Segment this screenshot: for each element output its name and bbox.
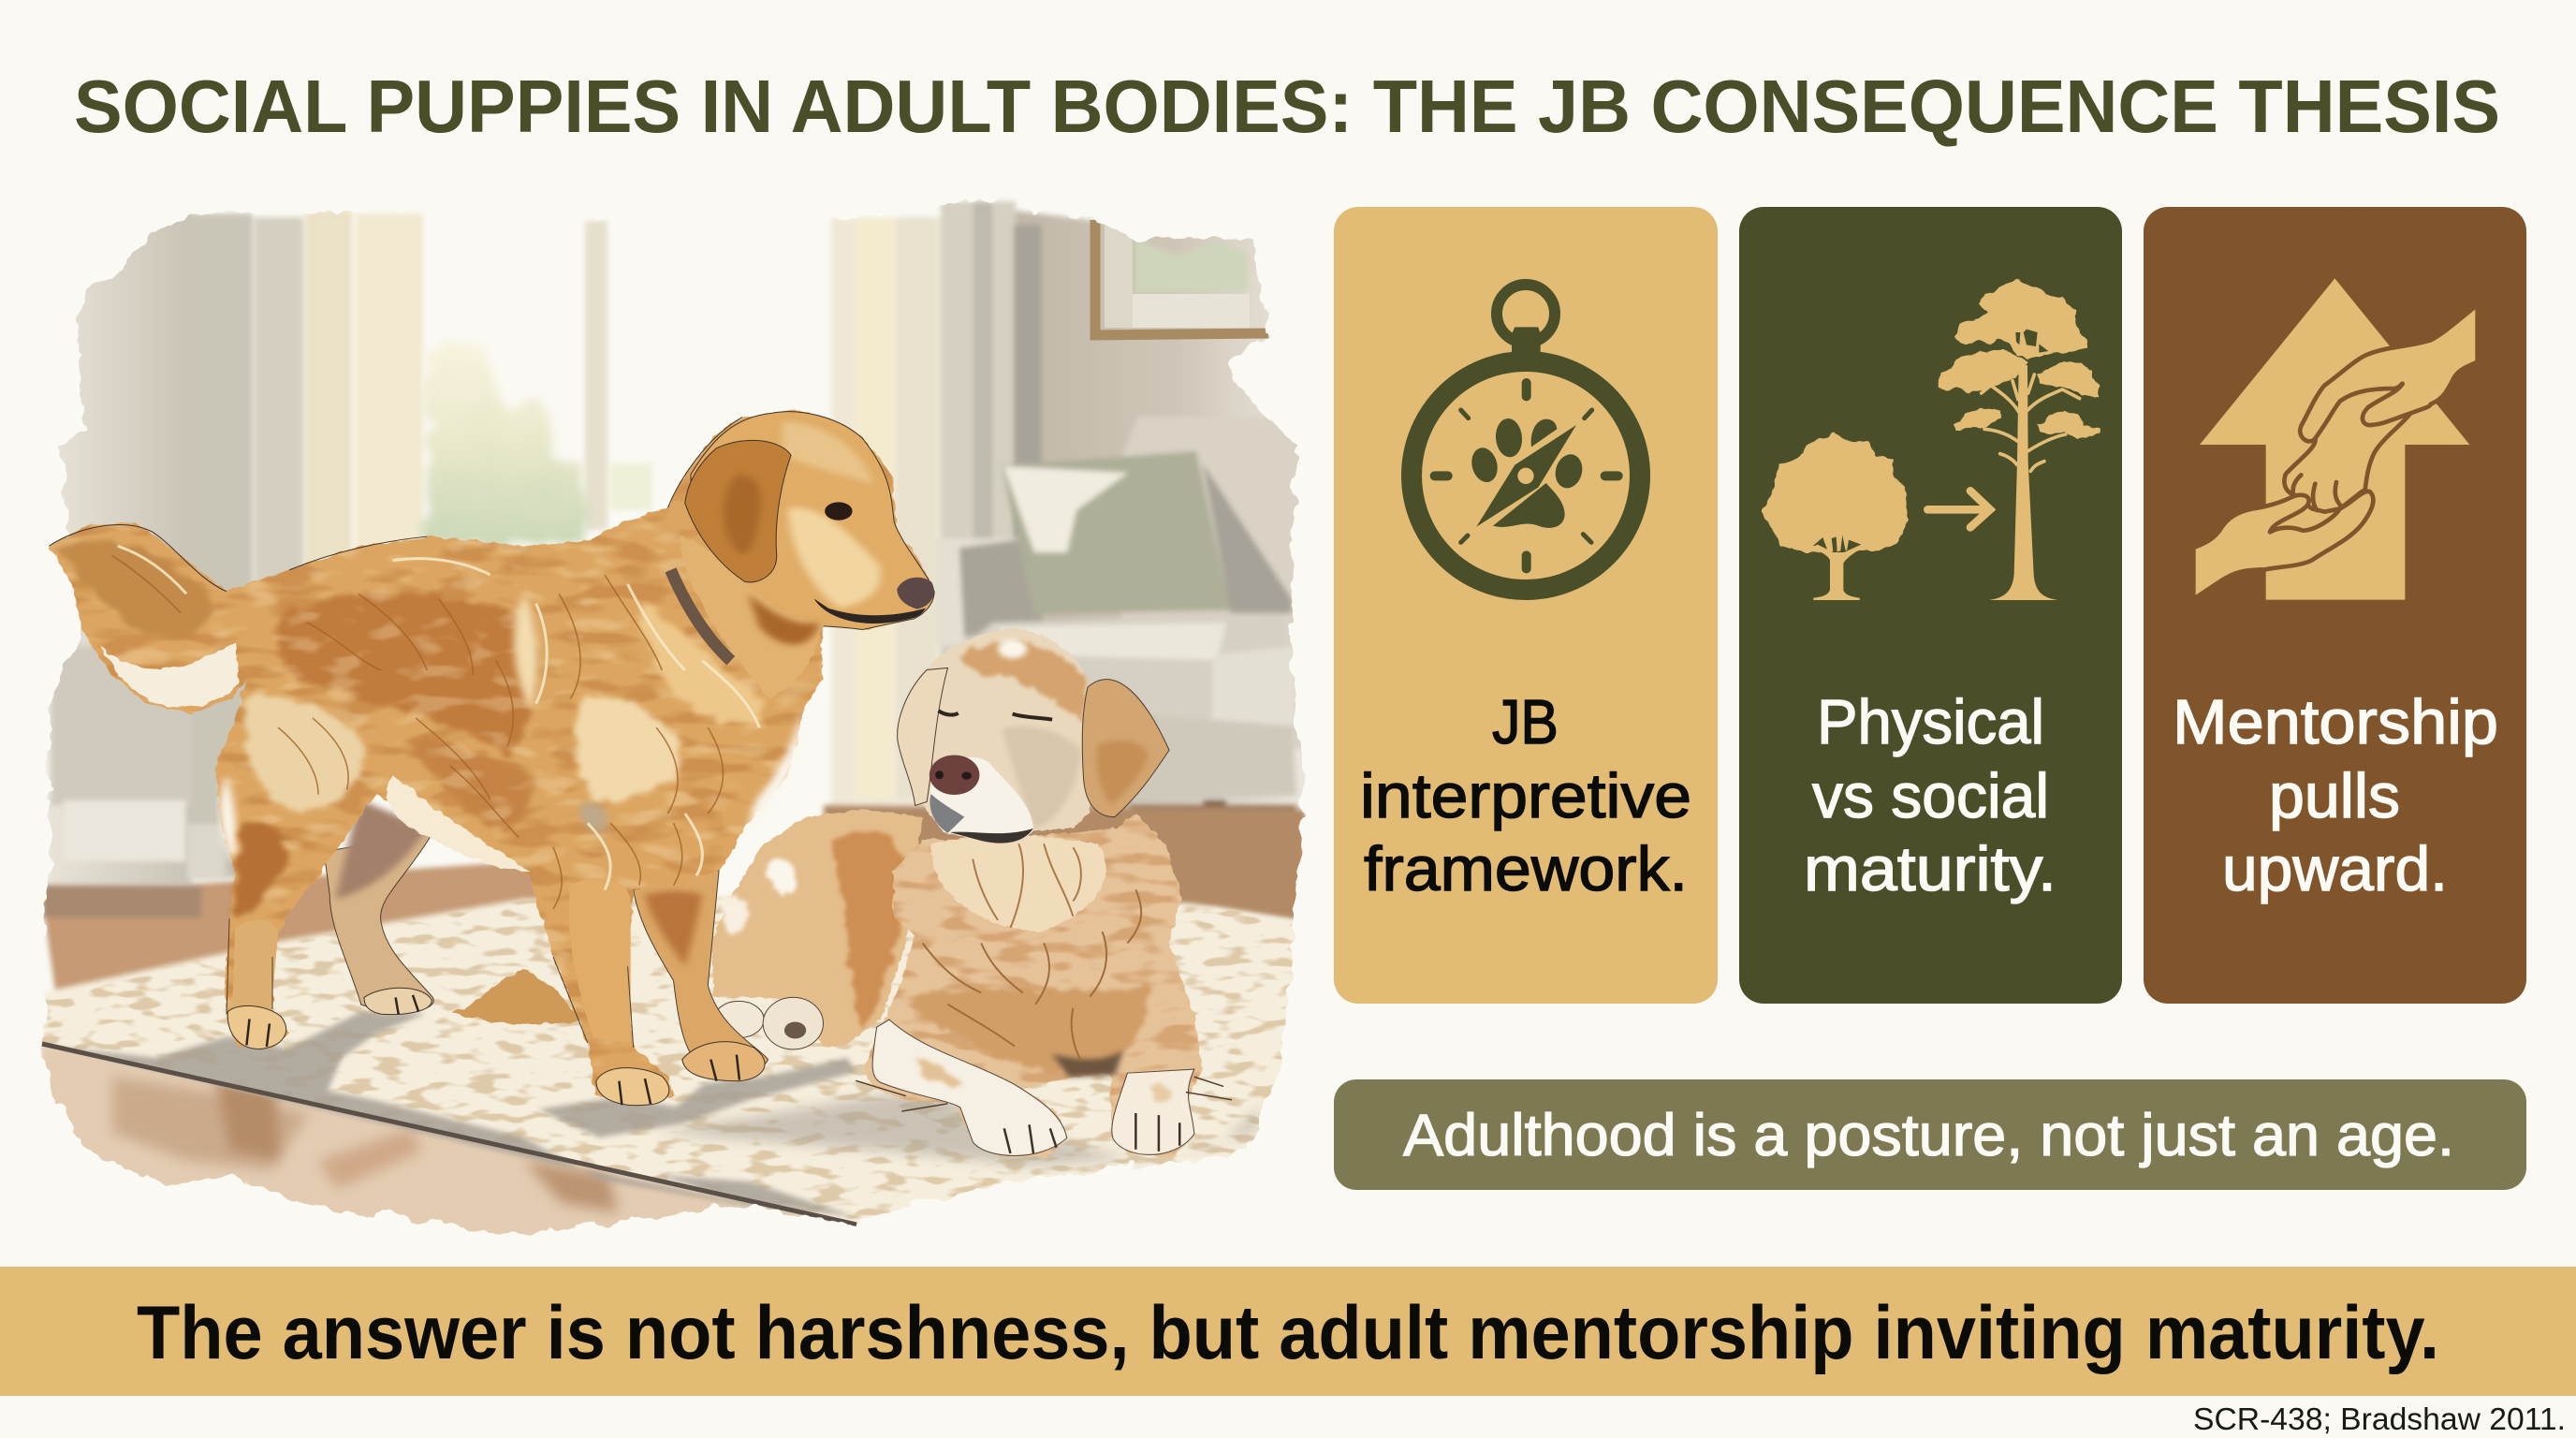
card text: vs social — [1812, 761, 2049, 831]
card text: interpretive — [1360, 761, 1691, 831]
card text: Mentorship — [2173, 687, 2498, 757]
card text: Physical — [1817, 687, 2044, 757]
chest, shoulder and hip highlights — [576, 697, 685, 800]
callout pill — [1334, 1079, 2526, 1190]
standing golden retriever — [49, 410, 934, 1106]
fur strokes — [112, 555, 723, 909]
gaps in the small tree canopy — [1813, 536, 1861, 559]
sofa and cushion — [936, 417, 1310, 871]
card text: maturity. — [1804, 834, 2056, 904]
icon: compass with paw — [1412, 285, 1640, 590]
body — [49, 410, 934, 1105]
nose, eye and mouth — [897, 578, 934, 609]
card text — [1804, 687, 2056, 904]
card text: pulls — [2269, 761, 2400, 831]
callout pill: Adulthood is a posture, not just an age. — [1403, 1103, 2454, 1168]
source note: SCR-438; Bradshaw 2011. — [2193, 1401, 2566, 1436]
bottom banner: The answer is not harshness, but adult mentorship inviting maturity. — [137, 1291, 2439, 1375]
tail plume — [60, 542, 212, 641]
hind leg colouring — [234, 822, 289, 918]
tail — [453, 969, 582, 1024]
card text: JB — [1492, 687, 1559, 757]
room backdrop: walls, curtains, window — [47, 201, 1310, 885]
chest and body — [864, 814, 1203, 1157]
leg outlines — [227, 918, 634, 1048]
illustration: watercolor of two golden retrievers in a living room — [0, 159, 1332, 1266]
rug shadow — [56, 1013, 856, 1225]
icon: upward arrow with helping hands — [2193, 278, 2478, 600]
saddle patches — [275, 593, 537, 756]
haunch — [711, 810, 923, 1047]
floor reflections — [112, 1077, 618, 1212]
lying senior dog — [453, 628, 1232, 1157]
card text: framework. — [1364, 834, 1688, 904]
collar — [670, 570, 731, 661]
nose, eyes — [929, 756, 979, 795]
wood floor — [37, 805, 1306, 1245]
head — [900, 628, 1090, 844]
card text — [2173, 687, 2498, 904]
ears — [1082, 680, 1169, 817]
card 1: JB interpretive framework — [1334, 207, 1718, 1004]
front leg colouring — [569, 878, 631, 1043]
head — [691, 412, 934, 630]
card text: upward. — [2222, 834, 2448, 904]
paper edge mask giving the wash its rough border — [0, 159, 1332, 1266]
picture frame — [1095, 220, 1268, 335]
card 3: mentorship pulls upward — [2144, 207, 2526, 1004]
fore legs — [872, 1020, 1067, 1155]
far legs — [324, 832, 433, 1013]
icon: small tree to tall tree — [1762, 279, 2100, 600]
rear paws — [713, 1001, 764, 1038]
paws — [227, 1005, 286, 1049]
mane under head — [680, 536, 823, 699]
window garden wash — [427, 342, 585, 543]
bottom banner — [0, 1267, 2576, 1396]
patterned rug — [42, 894, 1306, 1225]
title: SOCIAL PUPPIES IN ADULT BODIES: THE JB CONSEQUENCE THESIS — [74, 65, 2500, 148]
ear — [685, 440, 791, 582]
card 2: physical vs social maturity — [1739, 207, 2122, 1004]
card text — [1360, 687, 1691, 904]
fur strokes — [923, 889, 1141, 1062]
muzzle — [930, 757, 1033, 843]
